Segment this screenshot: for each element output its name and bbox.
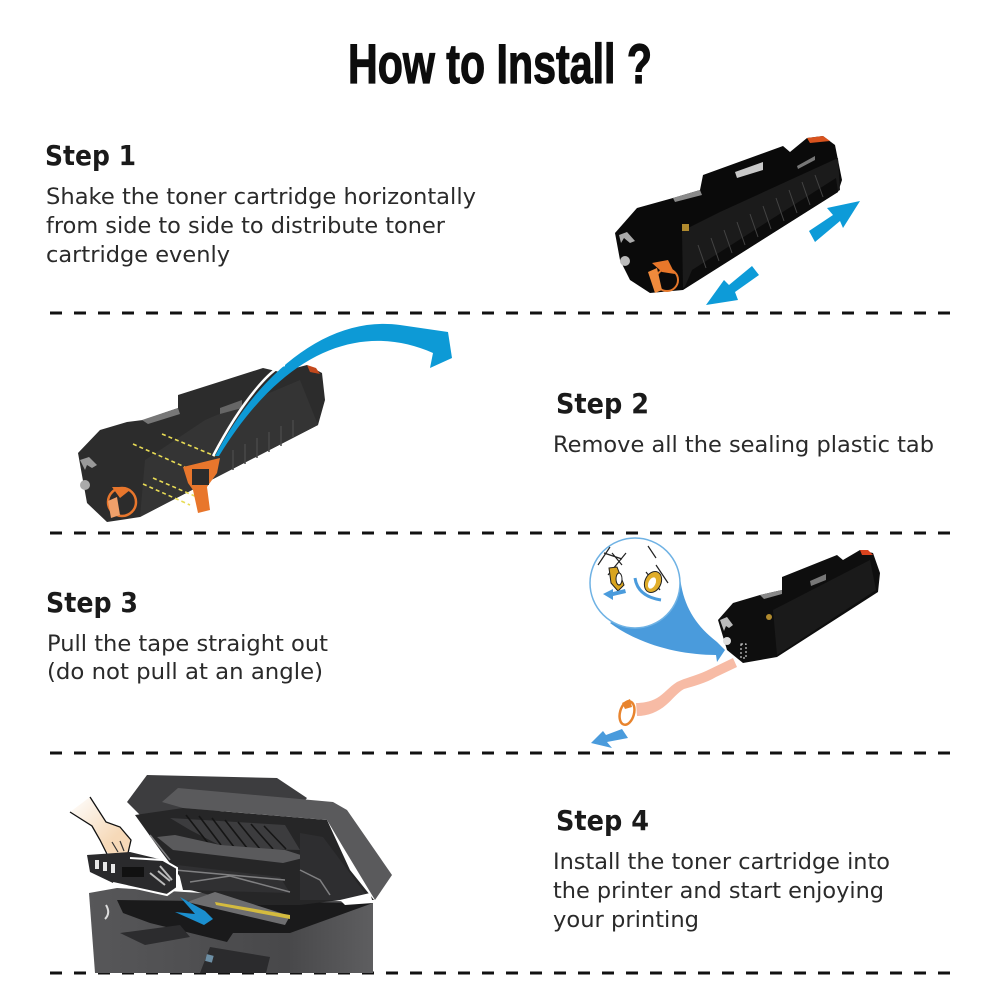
step 3 text: Pull the tape straight out bbox=[47, 632, 328, 657]
step 3 text bbox=[47, 632, 328, 685]
step 3 text: (do not pull at an angle) bbox=[47, 660, 323, 685]
step 4 text: the printer and start enjoying bbox=[553, 879, 884, 904]
title: How to Install ? bbox=[348, 32, 652, 95]
step 4 text bbox=[553, 850, 890, 933]
step 3 heading: Step 3 bbox=[46, 586, 138, 619]
step 4 illustration: installing cartridge in printer bbox=[70, 775, 392, 973]
step 2 text: Remove all the sealing plastic tab bbox=[553, 433, 934, 458]
step 1 text: cartridge evenly bbox=[46, 243, 230, 268]
step 1 text bbox=[46, 185, 476, 268]
step 2 illustration: removing sealing tab bbox=[78, 324, 452, 522]
step 4 text: Install the toner cartridge into bbox=[553, 850, 890, 875]
step 3 illustration: pulling the tape bbox=[590, 538, 880, 748]
step 2 heading: Step 2 bbox=[556, 387, 649, 420]
step 1 illustration: toner cartridge with arrows bbox=[615, 136, 860, 305]
step 1 text: from side to side to distribute toner bbox=[46, 214, 446, 239]
step 1 text: Shake the toner cartridge horizontally bbox=[46, 185, 476, 210]
step 4 text: your printing bbox=[553, 908, 699, 933]
step 4 heading: Step 4 bbox=[556, 804, 649, 837]
step 1 heading: Step 1 bbox=[45, 139, 136, 172]
